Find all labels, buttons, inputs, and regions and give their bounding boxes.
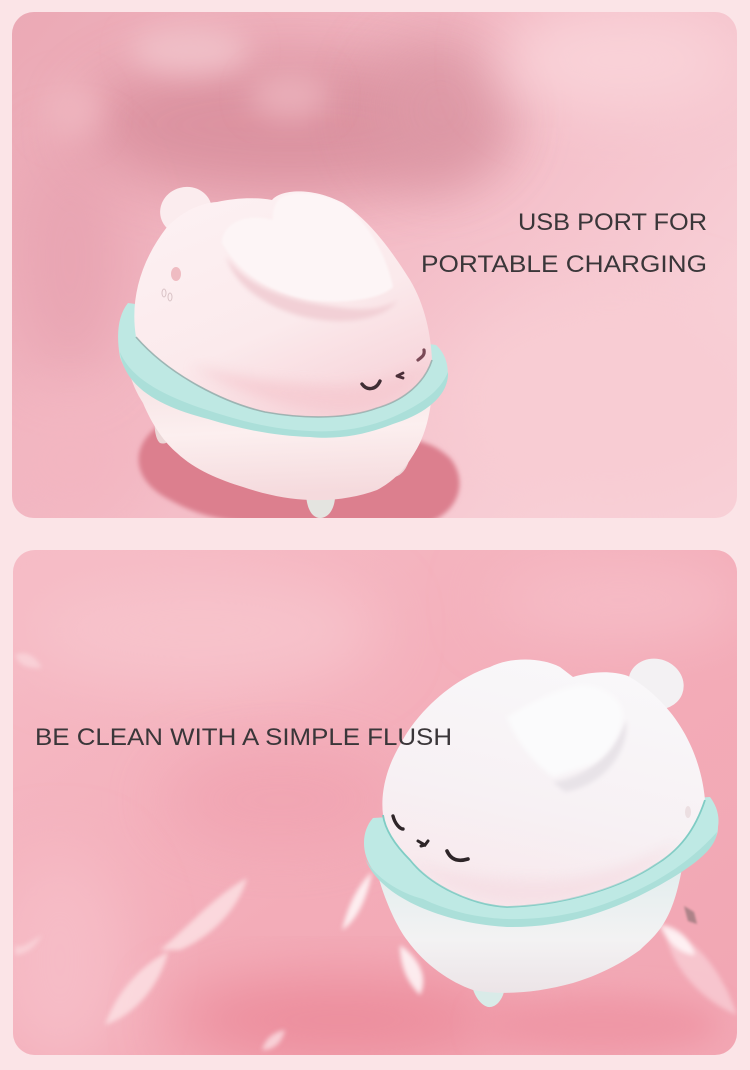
body lower blush <box>413 847 678 907</box>
text: USB port heading: USB PORT FOR <box>518 209 707 236</box>
panel: simple flush <box>0 550 750 1070</box>
product: rabbit in tub, back view <box>118 181 448 518</box>
body <box>134 191 432 417</box>
water ripples <box>15 653 737 1050</box>
USB port detail <box>162 267 181 301</box>
text: flush heading: BE CLEAN WITH A SIMPLE FLUSH <box>35 724 452 751</box>
body lower blush <box>210 367 429 416</box>
text: USB port heading <box>421 209 707 278</box>
rim inner line <box>383 800 705 907</box>
panel: USB port <box>0 5 750 525</box>
product: rabbit in tub, face view <box>364 651 719 1007</box>
ear on body shadow <box>228 261 392 322</box>
tub feet <box>155 420 410 518</box>
teal rim <box>364 797 719 923</box>
body <box>382 660 705 907</box>
rabbit face <box>393 816 468 860</box>
tub basin <box>127 360 432 500</box>
USB port detail <box>685 806 691 818</box>
shadow under tub <box>139 425 460 525</box>
ear on body shadow <box>557 726 626 791</box>
ear on body, heart-shaped <box>234 200 392 301</box>
ear <box>621 651 691 717</box>
text: USB port heading: PORTABLE CHARGING <box>421 251 707 278</box>
ear on body <box>542 744 612 772</box>
teal rim <box>118 303 448 434</box>
ear <box>155 181 217 241</box>
rabbit face <box>362 350 424 389</box>
tub basin <box>375 860 682 993</box>
tub foot <box>470 978 506 1007</box>
rim inner shadow <box>136 337 432 417</box>
